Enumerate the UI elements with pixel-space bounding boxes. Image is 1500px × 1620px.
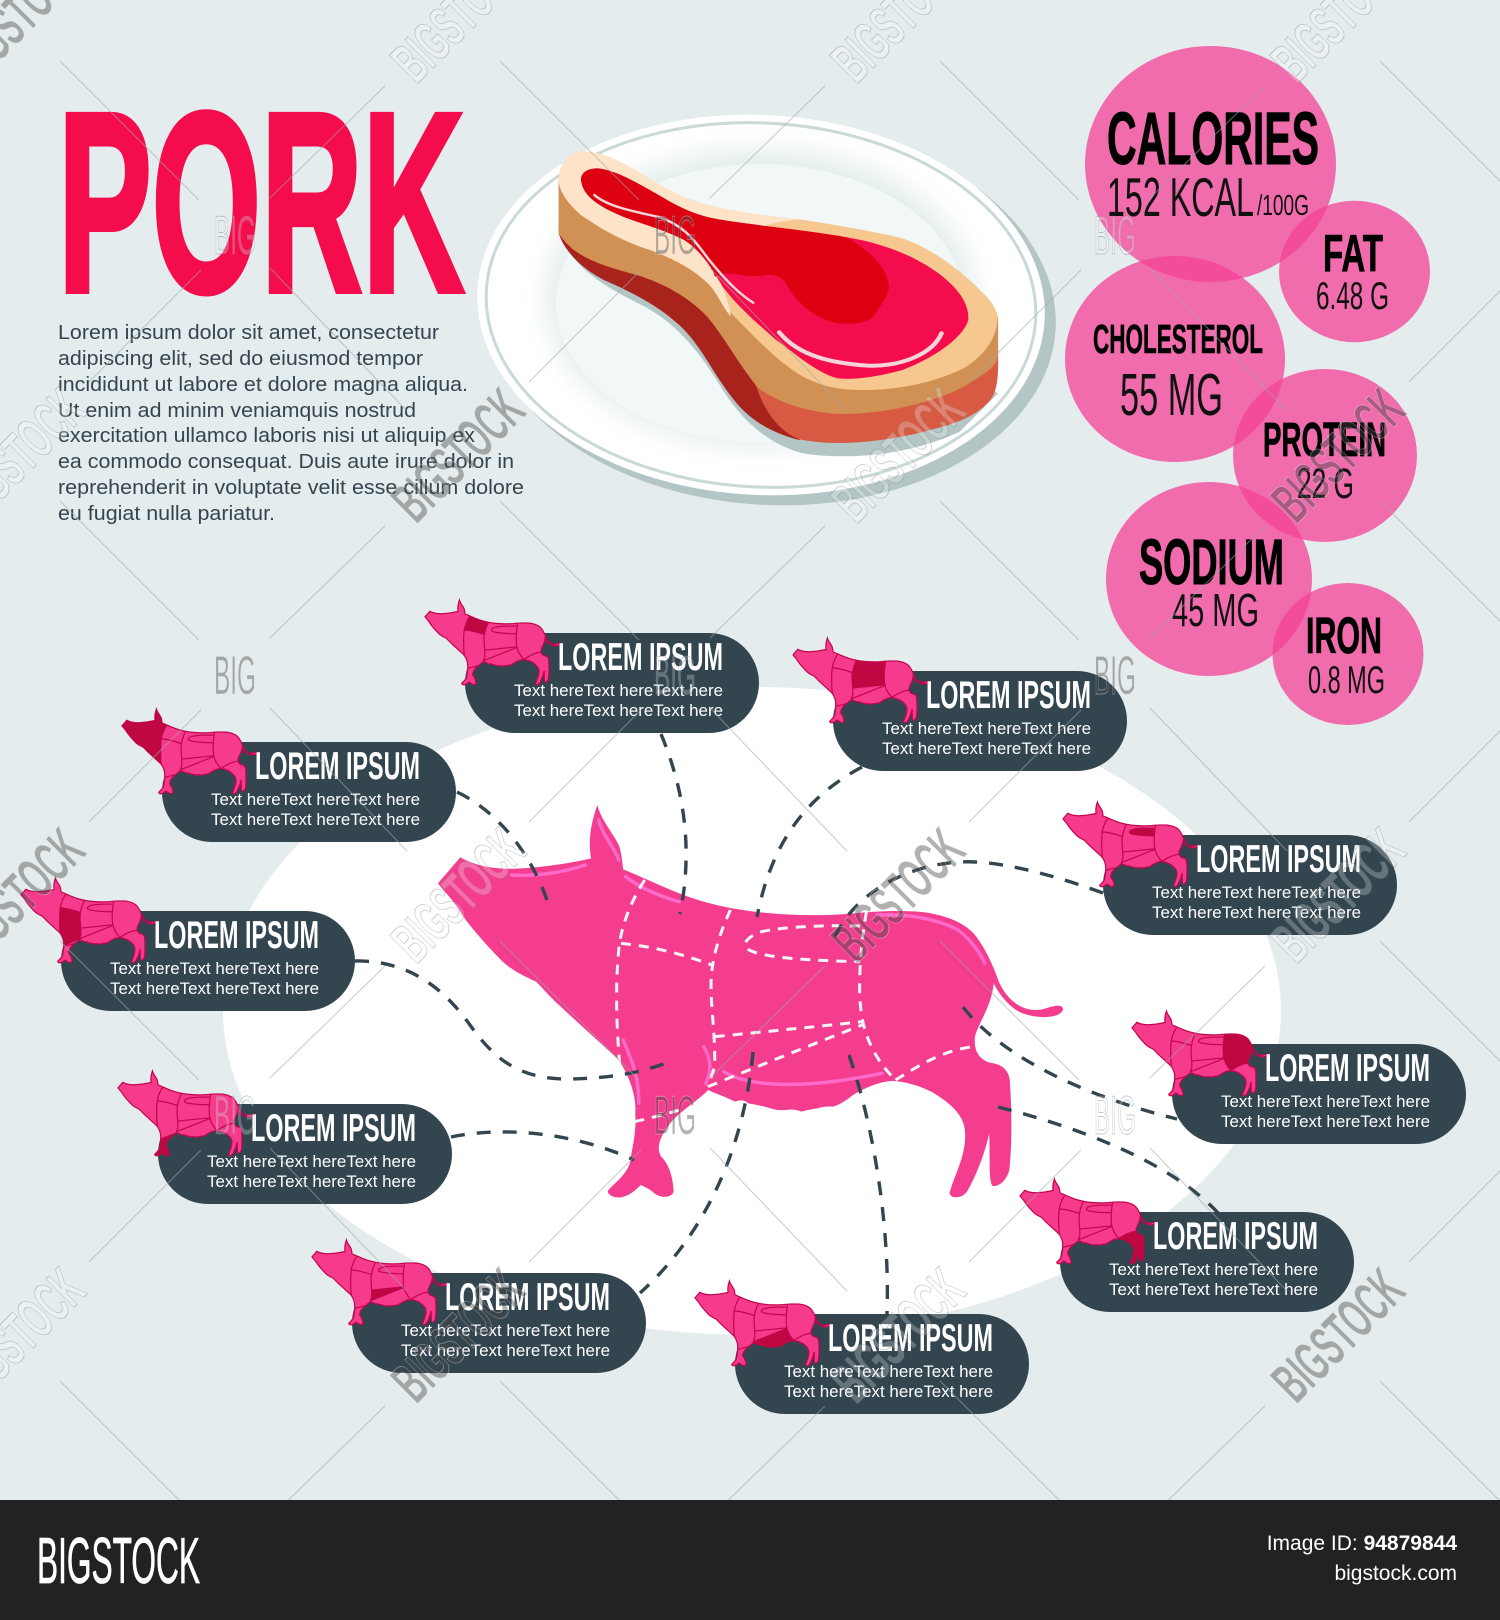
- bubble: calories: /100G: [1257, 190, 1309, 222]
- highlight on bone strip: [594, 195, 753, 303]
- watermark: BIGSTOCK marks: BIGSTOCK: [820, 1256, 977, 1414]
- plate rim: [467, 100, 1055, 510]
- bubble: cholesterol: CHOLESTEROL: [1093, 316, 1263, 362]
- card: loin cut: [1063, 802, 1397, 935]
- card: foreleg cut: [118, 1071, 452, 1204]
- card: mid back cut: Text hereText hereText here: [882, 720, 1091, 738]
- small pig icon: head highlighted: [114, 704, 257, 794]
- connector 3: [757, 767, 862, 917]
- card: belly cut: [695, 1281, 1029, 1414]
- watermark: BIG marks: BIG: [654, 1084, 696, 1146]
- card: hind leg cut: [1020, 1179, 1354, 1312]
- bubble: protein: PROTEIN: [1263, 414, 1386, 467]
- small pig icon: chest highlighted: [21, 878, 156, 963]
- bubble: calories: 152 KCAL: [1107, 166, 1254, 228]
- card: mid back cut: LOREM IPSUM: [926, 674, 1091, 717]
- card: shoulder cut: LOREM IPSUM: [558, 636, 723, 679]
- watermark: BIGSTOCK marks: BIGSTOCK: [380, 816, 537, 974]
- card: foreleg cut: Text hereText hereText here: [207, 1153, 416, 1171]
- watermark: BIG marks: BIG: [654, 204, 696, 266]
- card: hind leg cut: Text hereText hereText here: [1109, 1261, 1318, 1279]
- bubble: protein: [1233, 369, 1417, 542]
- small pig icon: ham highlighted: [1132, 1011, 1267, 1096]
- connector 9: [451, 1132, 634, 1160]
- bubble: cholesterol: 55 MG: [1120, 362, 1223, 428]
- image id: Image ID: 94879844: [1267, 1532, 1457, 1555]
- highlight on lean meat: [779, 332, 941, 366]
- card: brisket cut: LOREM IPSUM: [445, 1276, 610, 1319]
- connector 1: [457, 792, 548, 903]
- footer bar: BIGSTOCK: [37, 1524, 200, 1597]
- watermark: BIG marks: BIG: [214, 1084, 256, 1146]
- illustration: pork chop on plate: [467, 100, 1066, 520]
- card: hind leg cut: LOREM IPSUM: [1153, 1215, 1318, 1258]
- nutrition bubbles: [1065, 46, 1430, 725]
- tan top fat: [559, 152, 997, 390]
- watermark: BIG marks: [214, 204, 1136, 1146]
- watermark: BIGSTOCK marks: BIGSTOCK: [380, 376, 537, 534]
- connector 8: [640, 1052, 753, 1293]
- card: hind leg cut: Text hereText hereText here: [1109, 1281, 1318, 1299]
- pig highlights: [512, 820, 985, 1103]
- bubble: fat: [1279, 201, 1430, 342]
- intro paragraph: [58, 322, 524, 525]
- card: chest cut: Text hereText hereText here: [110, 960, 319, 978]
- connector 6: [998, 1107, 1219, 1214]
- text: BIG: [1094, 204, 1136, 266]
- watermark: BIG marks: BIG: [214, 204, 256, 266]
- watermark: BIGSTOCK marks: BIGSTOCK: [820, 816, 977, 974]
- bubble: fat: 6.48 G: [1316, 275, 1389, 318]
- plate shadow: [476, 108, 1066, 520]
- cream fat on bone end: [559, 152, 799, 317]
- small pig icon: brisket highlighted: [312, 1240, 447, 1325]
- small pig icon: shoulder highlighted: [425, 600, 560, 685]
- main pig with cut lines: [438, 805, 1063, 1197]
- bubble: sodium: 45 MG: [1172, 584, 1259, 636]
- card: loin cut: Text hereText hereText here: [1152, 884, 1361, 902]
- paragraph line 5: exercitation ullamco laboris nisi ut aliquip ex: [58, 425, 475, 447]
- dark red meat: [581, 168, 889, 324]
- plate well: [556, 164, 964, 442]
- tan fat side: [559, 178, 998, 414]
- card: ham cut: [1132, 1011, 1466, 1144]
- watermark: BIG marks: BIG: [654, 644, 696, 706]
- card: shoulder cut: [425, 600, 759, 733]
- bubble: protein: 22 G: [1297, 460, 1354, 508]
- red lean meat: [581, 168, 968, 379]
- small pig icon: mid back highlighted: [793, 638, 928, 723]
- card: loin cut: LOREM IPSUM: [1196, 838, 1361, 881]
- card: brisket cut: Text hereText hereText here: [401, 1342, 610, 1360]
- small pig icon: hind leg highlighted: [1020, 1179, 1157, 1267]
- card: mid back cut: Text hereText hereText here: [882, 740, 1091, 758]
- dark meat side: [559, 178, 853, 440]
- paragraph line 7: reprehenderit in voluptate velit esse cillum dolore: [58, 477, 524, 499]
- card: ham cut: Text hereText hereText here: [1221, 1093, 1430, 1111]
- pig silhouette: [438, 805, 1063, 1197]
- card: belly cut: Text hereText hereText here: [784, 1363, 993, 1381]
- card: chest cut: [21, 878, 355, 1011]
- bubble: fat: FAT: [1323, 225, 1383, 283]
- paragraph line 6: ea commodo consequat. Duis aute irure dolor in: [58, 451, 514, 473]
- small pig icon: foreleg highlighted: [118, 1071, 253, 1159]
- text: BIG: [1094, 1084, 1136, 1146]
- card: shoulder cut: Text hereText hereText here: [514, 682, 723, 700]
- chop shadow: [566, 247, 998, 456]
- card: brisket cut: [312, 1240, 646, 1373]
- card: shoulder cut: Text hereText hereText here: [514, 702, 723, 720]
- connector 7: [849, 1055, 887, 1314]
- card: mid back cut: [793, 638, 1127, 771]
- connector 2: [661, 734, 686, 914]
- bubble: calories: [1085, 46, 1336, 282]
- card: head cut: Text hereText hereText here: [211, 811, 420, 829]
- site url: bigstock.com: [1334, 1562, 1457, 1585]
- bubble: sodium: SODIUM: [1139, 526, 1284, 598]
- bubble: iron: 0.8 MG: [1308, 659, 1385, 702]
- text: BIG: [1094, 644, 1136, 706]
- watermark: BIG marks: BIG: [214, 644, 256, 706]
- white oval behind the pig diagram: [223, 687, 1281, 1335]
- card: foreleg cut: Text hereText hereText here: [207, 1173, 416, 1191]
- small pig icon: belly highlighted: [695, 1281, 830, 1366]
- card: belly cut: Text hereText hereText here: [784, 1383, 993, 1401]
- pig cut lines: [617, 880, 974, 1122]
- bubble: calories: CALORIES: [1107, 97, 1319, 180]
- connector 4: [831, 862, 1103, 945]
- card: foreleg cut: LOREM IPSUM: [251, 1107, 416, 1150]
- paragraph line 4: Ut enim ad minim veniamquis nostrud: [58, 400, 416, 422]
- bubble: iron: [1272, 583, 1424, 725]
- watermark: BIGSTOCK marks: BIGSTOCK: [380, 1256, 537, 1414]
- small pig icon: loin highlighted: [1063, 802, 1198, 887]
- connector 10: [355, 961, 666, 1079]
- card: head cut: LOREM IPSUM: [255, 745, 420, 788]
- connector 5: [963, 1007, 1177, 1119]
- card: head cut: [114, 704, 456, 842]
- paragraph line 2: adipiscing elit, sed do eiusmod tempor: [58, 348, 423, 370]
- footer bar: [0, 1500, 1500, 1620]
- watermark: BIGSTOCK marks: BIGSTOCK: [820, 376, 977, 534]
- card: brisket cut: Text hereText hereText here: [401, 1322, 610, 1340]
- card: head cut: Text hereText hereText here: [211, 791, 420, 809]
- paragraph line 1: Lorem ipsum dolor sit amet, consectetur: [58, 322, 439, 344]
- plate well shadow: [548, 152, 972, 444]
- pork chop: [559, 152, 998, 456]
- card: loin cut: Text hereText hereText here: [1152, 904, 1361, 922]
- card: chest cut: Text hereText hereText here: [110, 980, 319, 998]
- card: belly cut: LOREM IPSUM: [828, 1317, 993, 1360]
- bubble: cholesterol: [1065, 256, 1285, 462]
- plate ring: [477, 109, 1045, 501]
- paragraph line 3: incididunt ut labore et dolore magna aliqua.: [58, 374, 468, 396]
- paragraph line 8: eu fugiat nulla pariatur.: [58, 503, 275, 525]
- title: PORK: [58, 60, 464, 346]
- card: ham cut: Text hereText hereText here: [1221, 1113, 1430, 1131]
- orange meat side: [755, 347, 998, 443]
- bubble: sodium: [1106, 482, 1312, 676]
- card: chest cut: LOREM IPSUM: [154, 914, 319, 957]
- dashed connectors: [355, 734, 1219, 1314]
- bubble: iron: IRON: [1306, 607, 1382, 664]
